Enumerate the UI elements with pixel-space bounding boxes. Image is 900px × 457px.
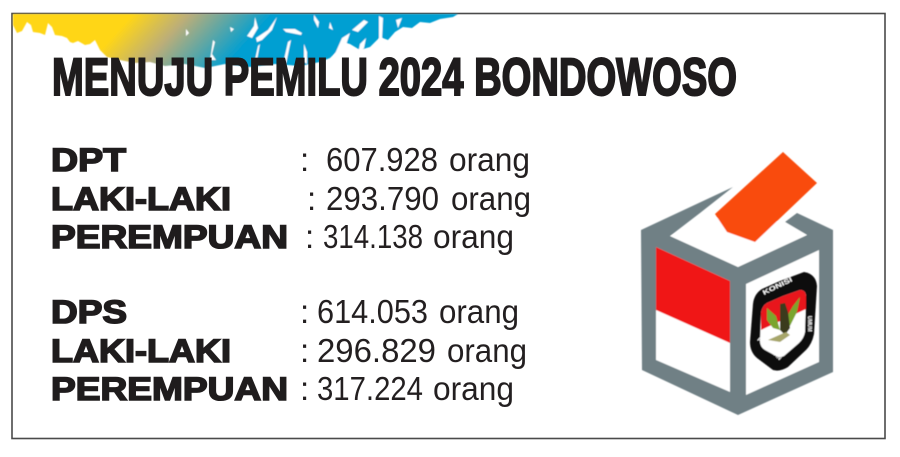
label: DPT: DPT [51,142,126,178]
emblem text: UMUM [806,316,812,332]
label: DPT perempuan [51,218,514,255]
label: DPS perempuan [51,370,514,407]
emblem text: PEMILIHAN [756,337,782,362]
label: DPS laki-laki: 296.829 [317,332,436,369]
box body [641,187,833,415]
label: DPT perempuan: : [305,218,314,255]
label: DPS laki-laki: LAKI-LAKI [51,333,231,369]
text block: DPS statistics [51,293,527,407]
label: DPT laki-laki [51,180,531,217]
label: DPS perempuan: PEREMPUAN [51,371,288,407]
label: DPT [51,141,530,178]
label: DPT perempuan: PEREMPUAN [51,219,288,255]
label: DPT laki-laki: orang [451,180,531,217]
label: DPS perempuan: orang [433,370,514,407]
label: DPS laki-laki [51,332,527,369]
emblem text [756,276,812,362]
left face white [656,247,730,392]
label: DPS perempuan: : [300,370,309,407]
right face [746,250,819,395]
label: DPT perempuan: orang [433,218,514,255]
left face red [656,247,730,343]
label: DPS: orang [439,293,519,330]
emblem text: KONISI [762,276,794,297]
label: DPT perempuan: 314.138 [323,218,423,255]
label: DPT laki-laki: : [307,180,316,217]
label: DPT: 607.928 [326,141,438,178]
label: DPS [51,293,519,330]
label: DPS: 614.053 [317,293,428,330]
label: DPS perempuan: 317.224 [317,370,423,407]
label: DPS laki-laki: : [300,332,309,369]
label: DPT: : [300,141,309,178]
text block: DPT statistics [51,141,531,255]
label: DPT: orang [449,141,530,178]
label: DPS: DPS [51,294,127,330]
ballot paper [715,152,817,242]
label: DPS: : [300,293,309,330]
label: DPS laki-laki: orang [447,332,527,369]
decorative paint splash header [13,14,458,68]
icon: KPU emblem [750,272,817,371]
box top opening [670,218,807,267]
label: DPT laki-laki: 293.790 [326,180,439,217]
label: DPT laki-laki: LAKI-LAKI [51,181,231,217]
icon: ballot box [641,152,833,415]
